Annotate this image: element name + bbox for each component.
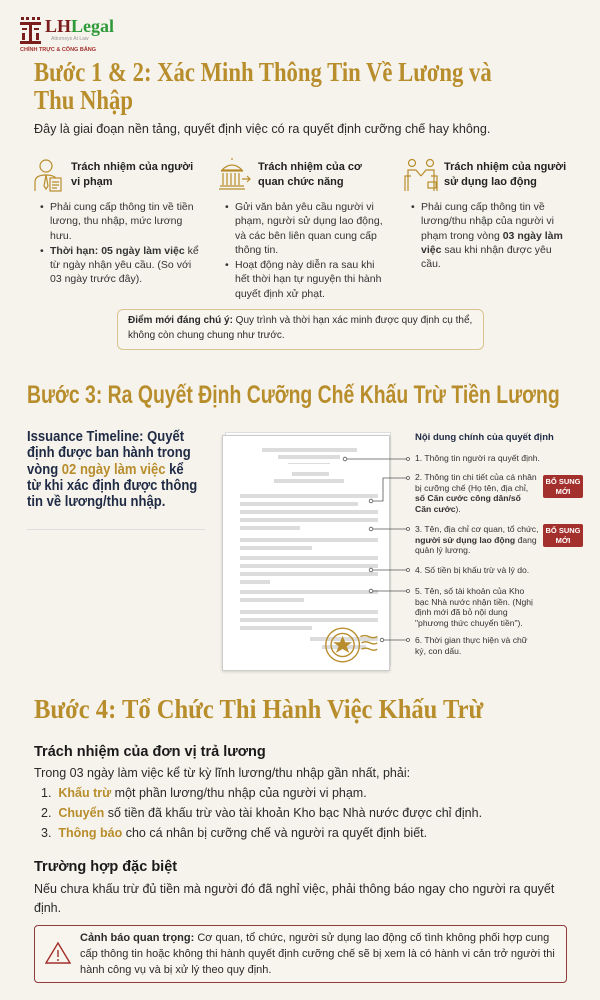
chart: decision document	[221, 432, 391, 673]
panel: agency: Gửi văn bản yêu cầu người vi phạm, người sử dụng lao động, và các bên liên quan cung cấp thông tin.	[235, 201, 383, 256]
title: step 1&2: Bước 1 & 2: Xác Minh Thông Tin Về Lương và	[34, 57, 492, 87]
icon: person document	[34, 159, 62, 192]
logo: LHLegal	[45, 16, 114, 36]
list: decision content items	[415, 453, 540, 656]
text block: payer responsibility: 1. Khấu trừ một phần lương/thu nhập của người vi phạm.	[41, 786, 367, 800]
callout: new point	[117, 309, 484, 350]
icon: seal stamp	[325, 628, 378, 662]
title: step 3: Bước 3: Ra Quyết Định Cưỡng Chế Khấu Trừ Tiền Lương	[27, 381, 560, 409]
list: decision content items: 2. Thông tin chi tiết của cá nhân bị cưỡng chế (Họ tên, địa chỉ, số Căn cước công dân/số Căn cước).	[415, 472, 537, 514]
panel: agency: Hoạt động này diễn ra sau khi hết thời hạn tự nguyện thi hành quyết định xử phạt.	[235, 259, 381, 300]
badge: new 2: MỚI	[556, 536, 570, 545]
logo: CHÍNH TRỰC & CÔNG BẰNG	[20, 47, 96, 53]
text block: issuance timeline	[27, 429, 197, 510]
text block: issuance timeline: tin về lương/thu nhập.	[27, 494, 165, 510]
text block: issuance timeline: vòng 02 ngày làm việc kể	[27, 462, 184, 478]
subtitle: Đây là giai đoạn nền tảng, quyết định việc có ra quyết định cưỡng chế hay không.	[34, 122, 490, 136]
list: decision content items: 5. Tên, số tài khoản của Kho bạc Nhà nước nhận tiền. (Nghị định mới đã bỏ nội dung "phương thức chuyển tiền").	[415, 586, 533, 628]
panel: agency	[219, 158, 383, 300]
text block: payer responsibility	[34, 744, 482, 840]
text block: payer responsibility: 2. Chuyển số tiền đã khấu trừ vào tài khoản Kho bạc Nhà nước được chỉ định.	[41, 806, 482, 820]
list: decision content items: 3. Tên, địa chỉ cơ quan, tổ chức, người sử dụng lao động đang quản lý lương.	[415, 524, 538, 555]
heading: decision content: Nội dung chính của quyết định	[415, 432, 554, 443]
connector lines	[342, 456, 410, 642]
list: decision content items: 6. Thời gian thực hiện và chữ ký, con dấu.	[415, 635, 528, 656]
list: decision content items: 4. Số tiền bị khấu trừ và lý do.	[415, 565, 529, 575]
text block: special case: Nếu chưa khấu trừ đủ tiền mà người đó đã nghỉ việc, phải thông báo ngay cho người ra quyết định.	[34, 882, 554, 915]
icon: logo mark	[20, 17, 41, 44]
title: step 1&2: Thu Nhập	[34, 85, 133, 115]
text block: issuance timeline: từ khi xác định được thông	[27, 478, 197, 494]
badge: new 2	[543, 524, 583, 547]
panel: violator: Thời hạn: 05 ngày làm việc kể từ ngày nhận yêu cầu. (So với 03 ngày trước đây).	[50, 245, 199, 285]
icon: warning triangle	[45, 942, 71, 964]
badge: new 1: BỔ SUNG	[545, 477, 580, 486]
text block: payer responsibility: 3. Thông báo cho cá nhân bị cưỡng chế và người ra quyết định biết.	[41, 826, 427, 840]
title: step 4: Bước 4: Tổ Chức Thi Hành Việc Khấu Trừ	[34, 694, 483, 724]
panel: employer: Trách nhiệm của người sử dụng lao động	[444, 161, 566, 188]
callout: warning: Cảnh báo quan trọng: Cơ quan, tổ chức, người sử dụng lao động cố tình không phối hợp cung cấp thông tin hoặc không thi hành quyết định cưỡng chế sẽ bị xem là có hành vi cản trở người thi hành công vụ và bị xử lý theo quy định.	[80, 932, 555, 976]
callout: warning	[34, 925, 567, 983]
badge: new 2: BỔ SUNG	[545, 526, 580, 535]
panel: violator	[34, 159, 199, 285]
panel: violator: Trách nhiệm của người vi phạm	[71, 161, 193, 188]
panel: violator: Phải cung cấp thông tin về tiền lương, thu nhập, mức lương hưu.	[50, 201, 194, 242]
icon: handshake	[404, 158, 438, 191]
text block: payer responsibility: Trong 03 ngày làm việc kể từ kỳ lĩnh lương/thu nhập gần nhất, phải:	[34, 766, 410, 780]
title: step 1&2	[34, 57, 492, 115]
text block: issuance timeline: định được ban hành trong	[27, 445, 191, 461]
text block: special case: Trường hợp đặc biệt	[34, 859, 177, 875]
text block: payer responsibility: Trách nhiệm của đơn vị trả lương	[34, 744, 266, 760]
icon: building	[219, 158, 251, 190]
text block: issuance timeline: Issuance Timeline: Quyết	[27, 429, 184, 445]
badge: new 1: MỚI	[556, 487, 570, 496]
panel: employer	[404, 158, 566, 270]
panel: employer: Phải cung cấp thông tin về lương/thu nhập của người vi phạm trong vòng 03 ngày làm việc sau khi nhận được yêu cầu.	[421, 201, 563, 270]
text block: special case	[34, 859, 554, 915]
logo	[20, 16, 114, 53]
panel: agency: Trách nhiệm của cơ quan chức năng	[258, 161, 362, 188]
logo: Attorneys At Law	[51, 36, 89, 42]
callout: new point: Điểm mới đáng chú ý: Quy trình và thời hạn xác minh được quy định cụ thể, không còn chung chung như trước.	[128, 315, 472, 340]
list: decision content items: 1. Thông tin người ra quyết định.	[415, 453, 540, 463]
badge: new 1	[543, 475, 583, 498]
